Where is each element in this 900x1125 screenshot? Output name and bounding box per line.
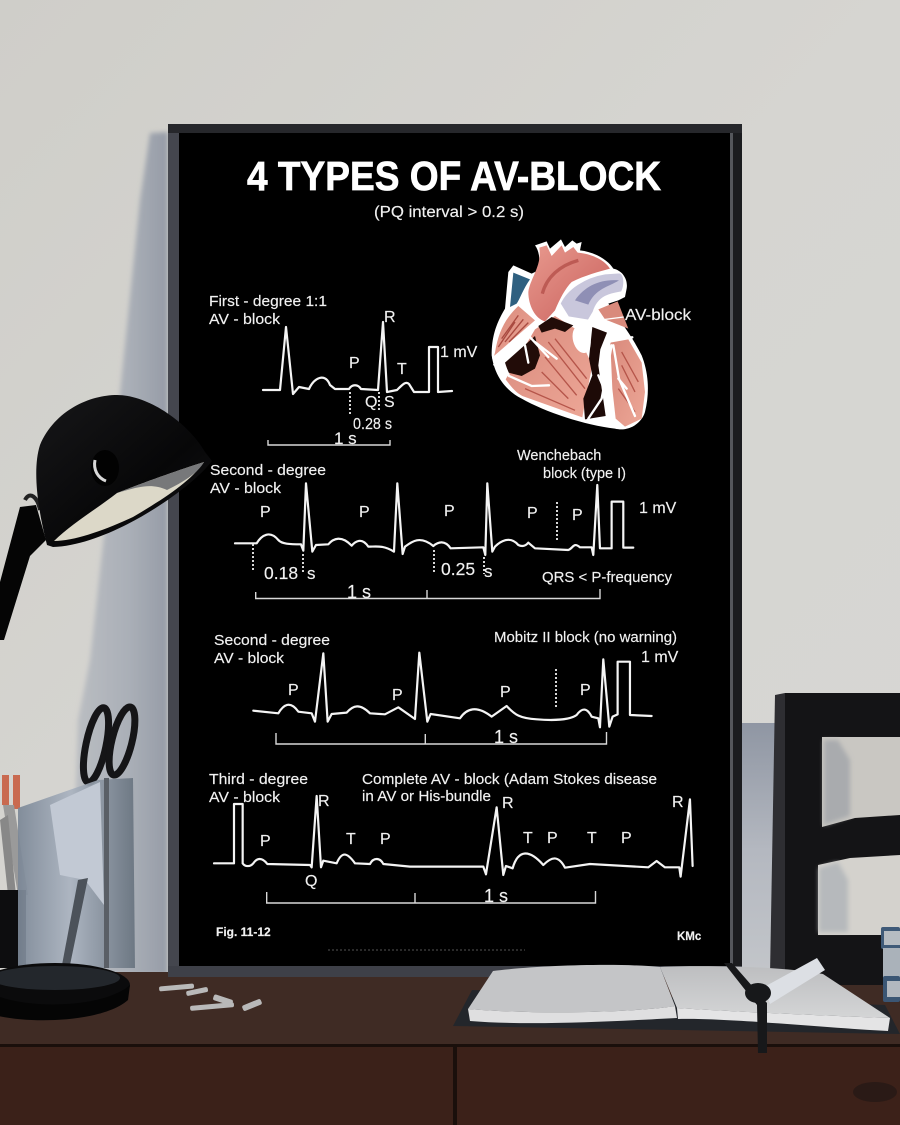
lamp highlight stroke: [95, 460, 106, 481]
desk lamp: [0, 395, 212, 640]
lamp inner shade: [117, 462, 204, 493]
third-degree wave labels: [260, 793, 684, 906]
Wenckebach type: block (type I): [543, 466, 626, 482]
third-degree wave labels: R: [672, 794, 684, 811]
Wenckebach heading: Second - degree: [210, 463, 326, 479]
heart label: AV-block: [625, 307, 692, 324]
lamp lit interior: [54, 462, 204, 541]
first-degree wave labels: 1 s: [334, 429, 357, 448]
Wenckebach ECG trace: [235, 483, 633, 555]
Mobitz wave labels: P: [580, 682, 591, 699]
third-degree wave labels: T: [587, 830, 597, 847]
faint dotted line: [328, 949, 525, 951]
Mobitz wave labels: P: [500, 684, 511, 701]
glass desk organizer: [18, 778, 135, 968]
pen: [745, 958, 825, 1004]
notebook left page: [468, 965, 675, 1012]
Mobitz wave labels: 1 s: [494, 727, 518, 747]
poster frame: [168, 124, 742, 977]
Wenckebach subheading: AV - block: [210, 481, 282, 497]
lamp highlight: [91, 450, 119, 486]
Mobitz dotted marker: [555, 669, 557, 709]
third-degree block strip: [209, 772, 693, 906]
notebook right page: [660, 966, 890, 1018]
third-degree wave labels: P: [380, 831, 391, 848]
third-degree subheading: AV - block: [209, 790, 281, 806]
third-degree wave labels: 1 s: [484, 886, 508, 906]
first-degree heading: First - degree 1:1: [209, 294, 327, 310]
Mobitz subheading: AV - block: [214, 651, 285, 667]
third-degree wave labels: P: [260, 833, 271, 850]
Wenckebach wave labels: 1 s: [347, 582, 371, 602]
Mobitz II second-degree strip: [214, 630, 679, 747]
right black picture frame: [770, 693, 900, 985]
stacked blue books: [881, 927, 900, 1002]
Mobitz wave labels: P: [288, 682, 299, 699]
first-degree 1 s bracket: [268, 440, 390, 445]
lamp dome: [36, 395, 212, 547]
Wenckebach wave labels: P: [359, 504, 370, 521]
first-degree wave labels: [334, 309, 478, 448]
Wenckebach wave labels: 0.25: [441, 559, 475, 579]
third-degree wave labels: R: [502, 795, 514, 812]
first-degree wave labels: 0.28 s: [353, 416, 392, 433]
Mobitz heading: Second - degree: [214, 633, 330, 649]
notebook left page edge: [468, 1006, 677, 1023]
third-degree heading: Third - degree: [209, 772, 308, 788]
Mobitz title: Mobitz II block (no warning): [494, 630, 677, 646]
notebook right page edge: [677, 1008, 890, 1031]
first-degree P-Q and Q-S dotted markers: [350, 392, 379, 416]
first-degree wave labels: R: [384, 309, 396, 326]
Wenckebach title: Wenchebach: [517, 448, 601, 464]
third-degree wave labels: P: [547, 830, 558, 847]
open notebook: [453, 958, 900, 1053]
third-degree wave labels: T: [523, 830, 533, 847]
first-degree wave labels: P: [349, 355, 360, 372]
third-degree wave labels: P: [621, 830, 632, 847]
Wenckebach wave labels: s: [484, 562, 492, 581]
Wenckebach wave labels: 1 mV: [639, 500, 677, 517]
author initials: KMc: [677, 931, 702, 943]
lamp arm: [0, 505, 46, 640]
Wenckebach wave labels: P: [444, 503, 455, 520]
Mobitz 1 s bracket: [276, 732, 606, 744]
Wenckebach wave labels: P: [260, 504, 271, 521]
Wenckebach wave labels: s: [307, 564, 316, 583]
first-degree wave labels: T: [397, 361, 407, 378]
scissors handles: [78, 705, 140, 784]
heart illustration: [492, 239, 648, 429]
Mobitz wave labels: 1 mV: [641, 649, 679, 666]
lamp joint: [25, 495, 40, 510]
pencils: [0, 775, 28, 968]
complete block location: in AV or His-bundle: [362, 789, 491, 805]
first-degree ECG trace: [263, 322, 452, 394]
Wenckebach wave labels: [260, 500, 677, 602]
first-degree block strip: [209, 294, 478, 448]
Wenckebach second-degree strip: [210, 448, 677, 602]
third-degree wave labels: T: [346, 831, 356, 848]
first-degree wave labels: 1 mV: [440, 344, 478, 361]
desk: [0, 972, 900, 1125]
Wenckebach QRS note: QRS < P-frequency: [542, 570, 673, 586]
third-degree ECG trace: [214, 796, 693, 877]
Mobitz wave labels: P: [392, 687, 403, 704]
paper clips: [159, 983, 262, 1012]
poster shadow on wall: [70, 132, 778, 978]
ribbon strap: [724, 963, 767, 1053]
complete block description: Complete AV - block (Adam Stokes disease: [362, 772, 657, 788]
Wenckebach wave labels: 0.18: [264, 563, 298, 583]
notebook cover: [453, 990, 900, 1034]
Wenckebach 1 s bracket: [256, 589, 600, 598]
Wenckebach dotted markers: [253, 502, 557, 574]
poster subtitle: (PQ interval > 0.2 s): [374, 204, 524, 221]
first-degree subheading: AV - block: [209, 312, 281, 328]
third-degree wave labels: R: [318, 793, 330, 810]
first-degree wave labels: Q: [365, 394, 377, 411]
third-degree 1 s bracket: [267, 891, 596, 903]
third-degree wave labels: Q: [305, 873, 317, 890]
Wenckebach wave labels: P: [572, 507, 583, 524]
Mobitz ECG trace: [253, 653, 652, 727]
poster title: 4 TYPES OF AV-BLOCK: [247, 153, 661, 199]
figure number: Fig. 11-12: [216, 925, 271, 939]
first-degree wave labels: S: [384, 394, 395, 411]
Mobitz wave labels: [288, 649, 679, 747]
organizer base: [0, 963, 130, 1020]
Wenckebach wave labels: P: [527, 505, 538, 522]
